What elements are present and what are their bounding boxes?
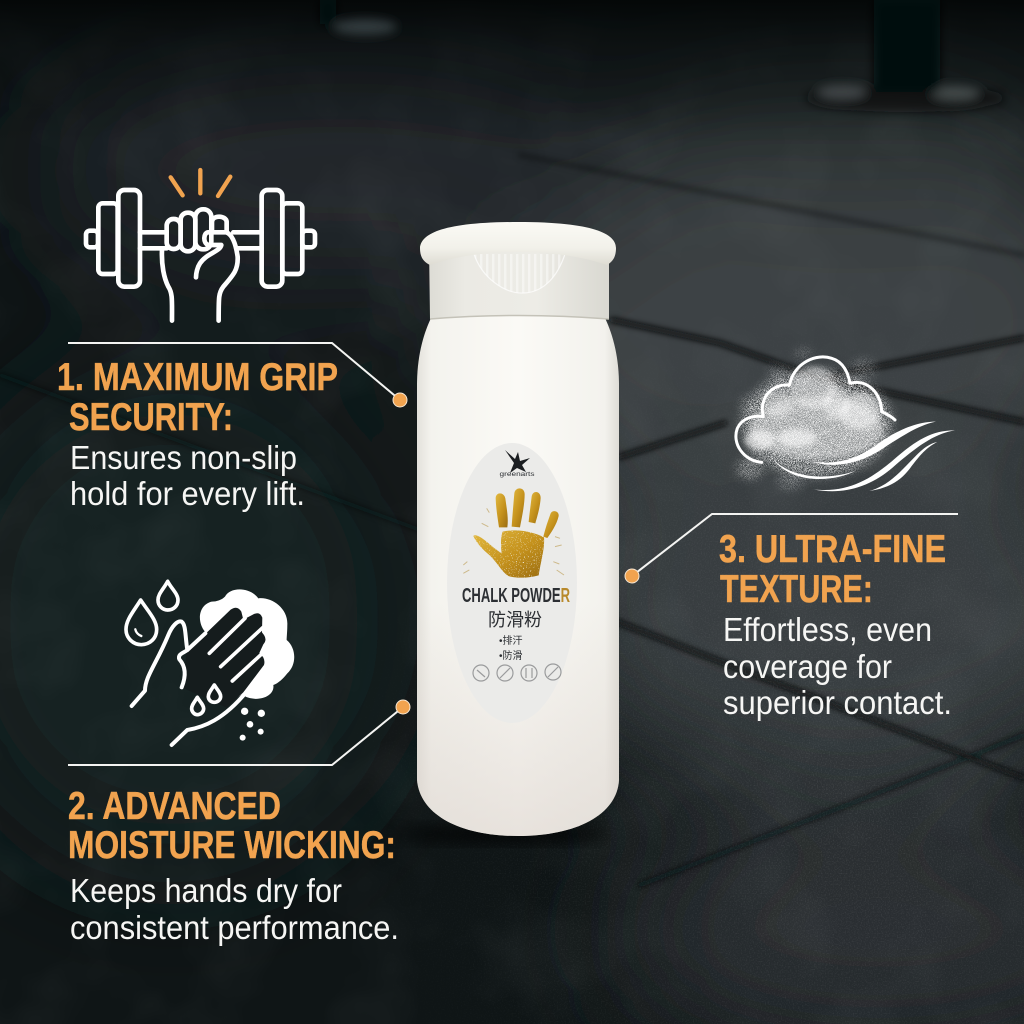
leader line 1 <box>68 343 400 400</box>
dumbbell and fist outline <box>86 190 315 321</box>
chalk cloud with hand silhouette <box>182 589 294 708</box>
label bullet one: •排汗 <box>499 634 523 647</box>
hand print worn texture <box>473 530 544 578</box>
bottle cap rim <box>420 222 616 265</box>
hand print rays <box>463 508 564 575</box>
falling chalk particles <box>240 708 265 741</box>
body text 3: Effortless, even <box>723 611 932 648</box>
body text 1: Ensures non-slip <box>70 439 297 476</box>
heading 3 line 2: TEXTURE: <box>720 568 873 611</box>
collar reflection <box>474 254 565 293</box>
collar seam <box>430 316 609 319</box>
icon: dumbbell gripped by fist <box>86 170 315 321</box>
product: chalk powder bottle <box>400 222 619 843</box>
powder speckles <box>737 349 892 489</box>
leader dot 3 <box>625 569 639 583</box>
icon: chalk powder cloud with wind <box>736 349 955 491</box>
label free-from icons <box>473 664 561 681</box>
label logo: greenarts <box>500 472 534 478</box>
callout 3: ultra-fine texture <box>625 514 958 721</box>
leader dot 2 <box>396 700 410 714</box>
background equipment silhouettes <box>320 0 1005 112</box>
body text 2 line 2: consistent performance. <box>70 909 399 946</box>
heading 1 line 2: SECURITY: <box>69 396 233 439</box>
leader line 3 <box>632 514 958 576</box>
leader line 2 <box>68 707 403 765</box>
hand outline <box>132 621 247 745</box>
product label <box>447 443 577 723</box>
wind streaks <box>773 422 955 491</box>
label golden hand print <box>463 488 564 578</box>
sweat drops <box>126 581 221 715</box>
label product name: CHALK POWDER <box>462 585 570 607</box>
powder haze <box>745 367 883 460</box>
bottle body <box>417 316 619 836</box>
bottle cap collar <box>429 245 609 319</box>
bottle shadow <box>400 825 610 843</box>
leader dot 1 <box>393 393 407 407</box>
icon: orange impact rays <box>171 170 230 196</box>
body text 1 line 2: hold for every lift. <box>70 475 305 512</box>
label chinese name: 防滑粉 <box>488 610 542 630</box>
bottle body lower shading <box>417 316 619 836</box>
heading 2 line 2: MOISTURE WICKING: <box>68 824 396 867</box>
callout 1: maximum grip security <box>57 343 407 512</box>
label logo <box>500 450 534 478</box>
cloud outline <box>736 357 895 462</box>
callout 2: advanced moisture wicking <box>68 700 410 946</box>
heading 3: 3. ULTRA-FINE <box>719 528 946 571</box>
icon: hand with sweat drops and chalk cloud <box>126 581 294 745</box>
body text 2: Keeps hands dry for <box>70 872 342 909</box>
body text 3 line 2: coverage for <box>723 648 892 685</box>
label bullet two: •防滑 <box>499 649 523 662</box>
heading 1: 1. MAXIMUM GRIP <box>57 356 338 399</box>
body text 3 line 3: superior contact. <box>723 684 952 721</box>
heading 2: 2. ADVANCED <box>68 785 281 828</box>
